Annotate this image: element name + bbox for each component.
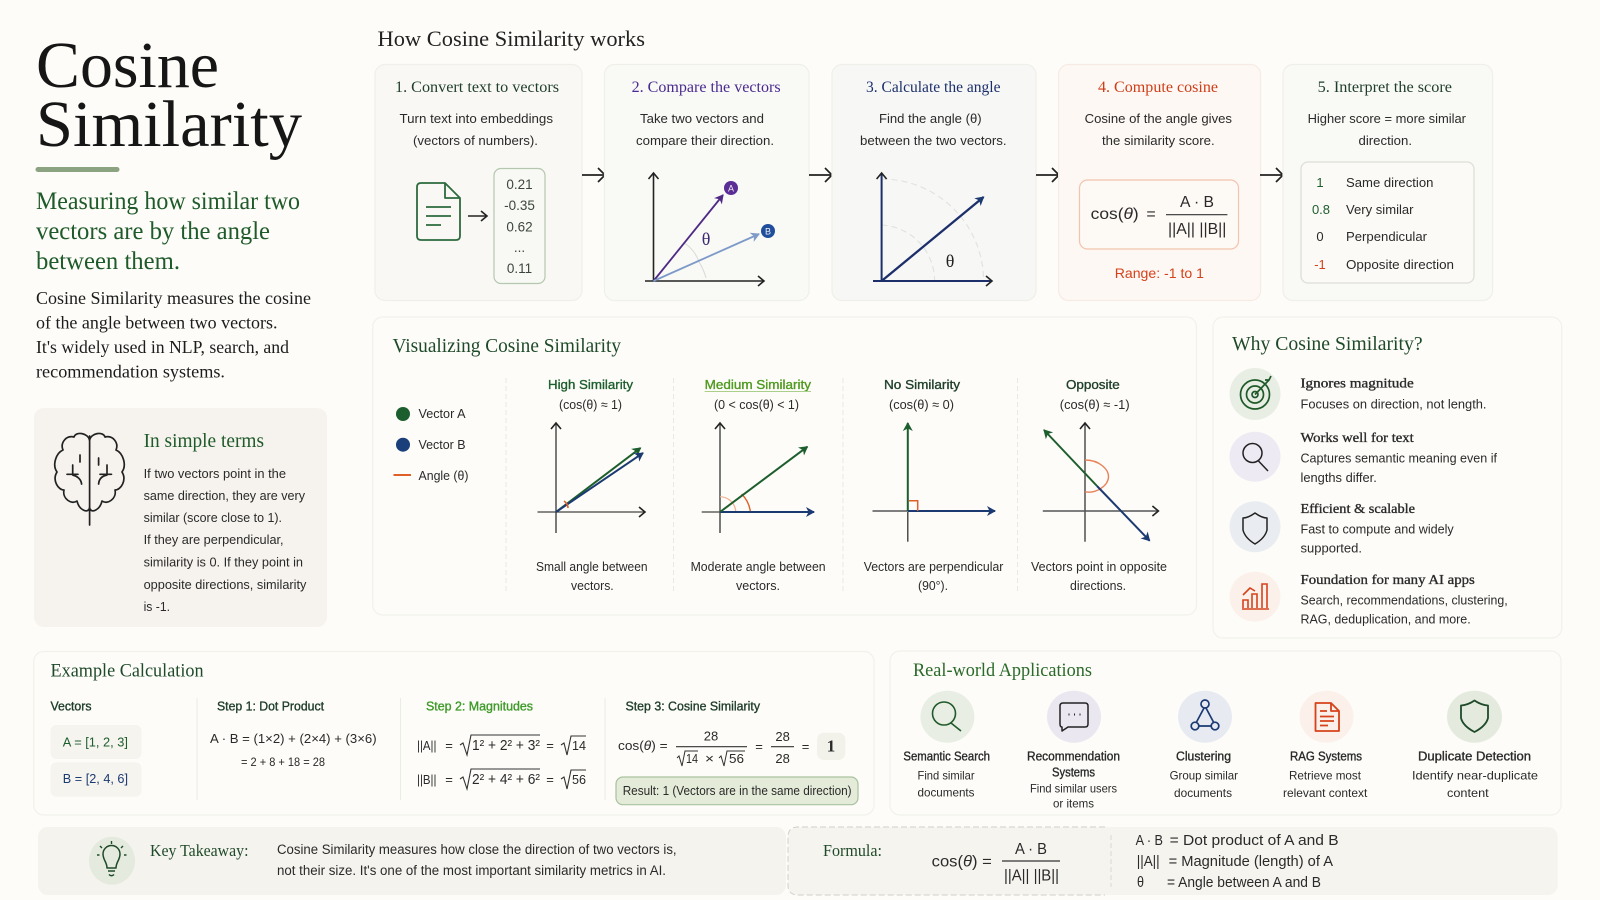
panel: step 4 — [1059, 64, 1261, 300]
vectors — [50, 700, 142, 797]
application: clustering: Group similar — [1170, 768, 1238, 782]
vector number box: -0.35 — [504, 198, 535, 213]
application: semantic search: Find similar — [918, 768, 975, 782]
reason: foundation for AI apps — [1230, 572, 1508, 627]
heading: why: Why Cosine Similarity? — [1232, 333, 1423, 355]
explanation text: similar (score close to 1). — [144, 510, 282, 525]
score scale table — [1301, 162, 1474, 283]
score scale table: 1 — [1316, 175, 1324, 190]
panel: step 1 — [375, 64, 582, 300]
step 2: magnitudes: = — [546, 738, 554, 753]
key takeaway text — [277, 842, 677, 878]
legend: Vector B — [418, 438, 466, 452]
step 3 description: between the two vectors. — [860, 133, 1007, 148]
subtitle: between them. — [36, 248, 180, 275]
step 3: cosine similarity: 14 — [686, 751, 698, 766]
intro text: Cosine Similarity measures the cosine — [36, 288, 311, 308]
chart: medium similarity: Moderate angle between — [691, 559, 826, 574]
step 5 description — [1308, 111, 1467, 148]
application: semantic search — [903, 691, 990, 800]
step 1: dot product: Step 1: Dot Product — [217, 700, 325, 714]
application: duplicate detection: Identify near-duplicate — [1412, 768, 1538, 782]
step 3: cosine similarity: 28 — [704, 729, 718, 744]
title: Cosine — [36, 29, 219, 102]
step 2: magnitudes: = — [445, 738, 453, 753]
chart: no similarity: (cos(θ) ≈ 0) — [889, 397, 954, 412]
heading: visualizing: Visualizing Cosine Similarity — [392, 335, 621, 357]
formula legend: A · B — [1136, 833, 1163, 849]
application: RAG systems: Retrieve most — [1289, 768, 1362, 782]
formula box: = — [1146, 206, 1156, 223]
step 3: cosine similarity: cos(θ) = — [618, 738, 668, 753]
panel: visualizing cosine similarity — [373, 317, 1196, 615]
chart: high similarity: High Similarity — [548, 377, 634, 392]
vector number box — [494, 168, 545, 284]
legend: Vector A — [418, 407, 466, 421]
application: clustering: Clustering — [1176, 750, 1231, 764]
step 2: magnitudes: 1² + 2² + 3² — [472, 738, 540, 754]
subtitle: vectors are by the angle — [36, 218, 270, 245]
chart: opposite: Vectors point in opposite — [1031, 559, 1167, 574]
application: semantic search: Semantic Search — [903, 750, 990, 764]
chart: two vectors: A — [728, 184, 734, 194]
formula box: ||A|| ||B|| — [1168, 221, 1226, 238]
score scale table: Very similar — [1346, 202, 1414, 217]
panel: key takeaway — [38, 827, 786, 895]
step 1 description: Turn text into embeddings — [400, 111, 554, 126]
step 3: cosine similarity — [616, 700, 858, 805]
chart: two vectors — [645, 173, 775, 281]
application: RAG systems: RAG Systems — [1290, 750, 1362, 764]
formula expression: cos(θ) = — [932, 854, 992, 871]
chart: two vectors: B — [765, 226, 771, 236]
step 3: cosine similarity: = — [755, 739, 763, 754]
icon: light bulb — [89, 837, 135, 885]
title accent bar — [36, 167, 120, 172]
formula expression: A · B — [1015, 841, 1047, 858]
result badge — [616, 777, 858, 805]
vectors: A = [1, 2, 3] — [63, 735, 128, 750]
chart: no similarity: No Similarity — [884, 377, 961, 392]
vector number box: 0.62 — [506, 220, 533, 234]
reason: foundation for AI apps: RAG, deduplication, and more. — [1300, 612, 1471, 627]
step 2: magnitudes: Step 2: Magnitudes — [426, 700, 533, 714]
step 3: cosine similarity: Step 3: Cosine Similarity — [626, 700, 761, 714]
chart: medium similarity: Medium Similarity — [705, 377, 812, 392]
heading: example: Example Calculation — [50, 662, 204, 682]
score scale table: Perpendicular — [1346, 229, 1428, 244]
reason: ignores magnitude: Focuses on direction, not length. — [1300, 397, 1486, 412]
panel: why cosine similarity — [1213, 317, 1562, 638]
icon: brain — [55, 433, 124, 525]
chart: high similarity — [536, 377, 648, 593]
chart: medium similarity: vectors. — [736, 578, 780, 593]
heading: how it works: How Cosine Similarity works — [378, 26, 645, 51]
step 2: magnitudes: = — [546, 772, 554, 787]
title: Similarity — [36, 88, 302, 161]
step 4 description — [1085, 111, 1233, 148]
step 3: cosine similarity: × — [705, 751, 714, 766]
arrow: step 2 to 3 — [809, 174, 832, 176]
step 5 description: direction. — [1358, 133, 1412, 148]
result badge: Result: 1 (Vectors are in the same direction) — [623, 784, 852, 798]
step 4 title: 4. Compute cosine — [1098, 79, 1218, 96]
title — [36, 29, 302, 161]
reason: works well for text: Works well for text — [1300, 431, 1414, 446]
application: duplicate detection — [1412, 691, 1538, 800]
formula legend — [1136, 833, 1339, 891]
application: RAG systems: relevant context — [1283, 786, 1368, 800]
chart: opposite — [1031, 377, 1167, 593]
chart: no similarity: Vectors are perpendicular — [864, 559, 1004, 574]
step 3: cosine similarity: 1 — [827, 736, 835, 756]
application: recommendation systems: Recommendation — [1027, 750, 1120, 764]
step 2 description: Take two vectors and — [640, 111, 764, 126]
application: recommendation systems: Systems — [1052, 766, 1095, 780]
chart: medium similarity — [691, 377, 826, 593]
chart: angle: θ — [946, 251, 954, 271]
reason: works well for text: Captures semantic meaning even if — [1300, 451, 1497, 466]
vector number box: 0.21 — [506, 177, 533, 192]
step 2: magnitudes: 14 — [572, 738, 586, 753]
chart: high similarity: vectors. — [571, 578, 614, 593]
panel: formula — [788, 827, 1558, 895]
subtitle: Measuring how similar two — [36, 188, 300, 215]
key takeaway text: Cosine Similarity measures how close the direction of two vectors is, — [277, 842, 677, 857]
explanation text: similarity is 0. If they point in — [144, 554, 303, 570]
key takeaway label: Key Takeaway: — [150, 841, 248, 860]
score scale table: Same direction — [1346, 175, 1433, 190]
application: duplicate detection: Duplicate Detection — [1418, 750, 1531, 764]
reason: foundation for AI apps: Foundation for many AI apps — [1300, 573, 1475, 588]
step 5 title: 5. Interpret the score — [1318, 79, 1452, 96]
application: clustering — [1170, 691, 1238, 800]
step 3 description — [860, 111, 1007, 148]
reason: ignores magnitude — [1230, 368, 1486, 420]
explanation text: If they are perpendicular, — [144, 532, 284, 547]
reason: efficient and scalable: Efficient & scalable — [1300, 502, 1415, 517]
intro text: of the angle between two vectors. — [36, 312, 278, 332]
icon: document — [417, 183, 460, 240]
heading: applications: Real-world Applications — [913, 661, 1092, 681]
arrow: text to vector — [468, 215, 487, 217]
application: clustering: documents — [1174, 786, 1232, 800]
heading: in simple terms: In simple terms — [144, 431, 264, 452]
step 3: cosine similarity: 28 — [775, 729, 790, 744]
step 3: cosine similarity: 28 — [775, 751, 790, 766]
arrow: step 3 to 4 — [1036, 174, 1059, 176]
formula legend: = Magnitude (length) of A — [1169, 854, 1333, 870]
application: recommendation systems: Find similar users — [1030, 781, 1117, 795]
formula legend: = Dot product of A and B — [1170, 833, 1339, 849]
legend: Angle (θ) — [418, 469, 468, 483]
formula expression: ||A|| ||B|| — [1004, 868, 1059, 885]
step 2 description — [636, 111, 774, 148]
key takeaway text: not their size. It's one of the most important similarity metrics in AI. — [277, 863, 666, 878]
vectors: Vectors — [50, 700, 92, 714]
explanation text: If two vectors point in the — [144, 466, 286, 481]
formula box: A · B — [1180, 194, 1214, 211]
application: duplicate detection: content — [1447, 786, 1489, 800]
explanation text: same direction, they are very — [144, 488, 305, 503]
formula legend: ||A|| — [1137, 854, 1160, 870]
panel: real-world applications — [890, 651, 1561, 815]
formula legend: = Angle between A and B — [1167, 875, 1321, 891]
step 1: dot product — [210, 700, 377, 769]
range label: Range: -1 to 1 — [1115, 265, 1204, 281]
reason: works well for text: lengths differ. — [1300, 470, 1377, 485]
chart: opposite: Opposite — [1066, 377, 1120, 392]
formula box — [1080, 180, 1238, 249]
chart: high similarity: (cos(θ) ≈ 1) — [559, 397, 622, 412]
intro text: recommendation systems. — [36, 362, 225, 382]
panel: example calculation — [34, 652, 874, 815]
step 3: cosine similarity: 56 — [729, 751, 744, 766]
reason: efficient and scalable: Fast to compute and widely — [1300, 522, 1454, 537]
step 2: magnitudes: ||B|| — [417, 772, 436, 787]
step 1: dot product: A · B = (1×2) + (2×4) + (3×6) — [210, 731, 377, 746]
legend — [394, 407, 468, 483]
chart: no similarity: (90°). — [918, 578, 948, 593]
chart: angle — [873, 173, 992, 281]
step 5 description: Higher score = more similar — [1308, 111, 1467, 126]
chart: opposite: directions. — [1070, 578, 1126, 593]
step 3 title: 3. Calculate the angle — [866, 79, 1000, 96]
application: RAG systems — [1283, 691, 1368, 800]
subtitle — [36, 188, 300, 275]
step 1 description: (vectors of numbers). — [413, 133, 538, 148]
chart: medium similarity: (0 < cos(θ) < 1) — [714, 397, 799, 412]
step 4 description: Cosine of the angle gives — [1085, 111, 1233, 126]
application: semantic search: documents — [918, 786, 974, 800]
formula expression — [932, 841, 1060, 885]
arrow: step 4 to 5 — [1260, 174, 1283, 176]
score scale table: 0 — [1316, 229, 1324, 244]
step 2: magnitudes: ||A|| — [417, 738, 436, 753]
reason: foundation for AI apps: Search, recommendations, clustering, — [1300, 593, 1508, 608]
step 2: magnitudes: 56 — [572, 772, 586, 787]
explanation text — [144, 466, 307, 614]
explanation text: is -1. — [144, 599, 170, 614]
formula box: cos(θ) — [1091, 206, 1139, 223]
panel: step 5 — [1283, 64, 1493, 300]
step 2: magnitudes — [417, 700, 586, 789]
reason: efficient and scalable: supported. — [1300, 541, 1362, 556]
panel: step 3 — [832, 64, 1036, 300]
chart: high similarity: Small angle between — [536, 559, 648, 574]
chart: two vectors: θ — [702, 229, 710, 249]
step 4 description: the similarity score. — [1102, 133, 1215, 148]
step 2: magnitudes: 2² + 4² + 6² — [472, 772, 540, 788]
explanation text: opposite directions, similarity — [144, 577, 307, 592]
formula label: Formula: — [823, 841, 882, 860]
step 2 description: compare their direction. — [636, 133, 774, 148]
score scale table: 0.8 — [1312, 202, 1330, 217]
score scale table: -1 — [1314, 257, 1326, 272]
step 3: cosine similarity: = — [802, 739, 809, 754]
formula legend: θ — [1137, 875, 1144, 891]
intro text — [36, 288, 311, 382]
reason: works well for text — [1230, 431, 1497, 485]
application: recommendation systems: or items — [1053, 797, 1094, 811]
step 1 title: 1. Convert text to vectors — [395, 79, 559, 96]
reason: ignores magnitude: Ignores magnitude — [1300, 377, 1414, 392]
score scale table: Opposite direction — [1346, 257, 1454, 272]
step 3 description: Find the angle (θ) — [879, 111, 982, 126]
step 1: dot product: = 2 + 8 + 18 = 28 — [241, 755, 325, 769]
step 1 description — [400, 111, 554, 148]
vector number box: 0.11 — [507, 261, 532, 276]
panel: step 2 — [604, 64, 809, 300]
application: recommendation systems — [1027, 691, 1120, 811]
intro text: It's widely used in NLP, search, and — [36, 337, 289, 357]
vectors: B = [2, 4, 6] — [63, 771, 128, 786]
step 2 title: 2. Compare the vectors — [632, 79, 781, 96]
chart: opposite: (cos(θ) ≈ -1) — [1060, 397, 1130, 412]
reason: efficient and scalable — [1230, 501, 1454, 556]
panel: in simple terms — [34, 408, 327, 627]
arrow: step 1 to 2 — [582, 174, 605, 176]
step 2: magnitudes: = — [445, 772, 453, 787]
chart: no similarity — [864, 377, 1004, 593]
vector number box: ... — [514, 240, 525, 255]
